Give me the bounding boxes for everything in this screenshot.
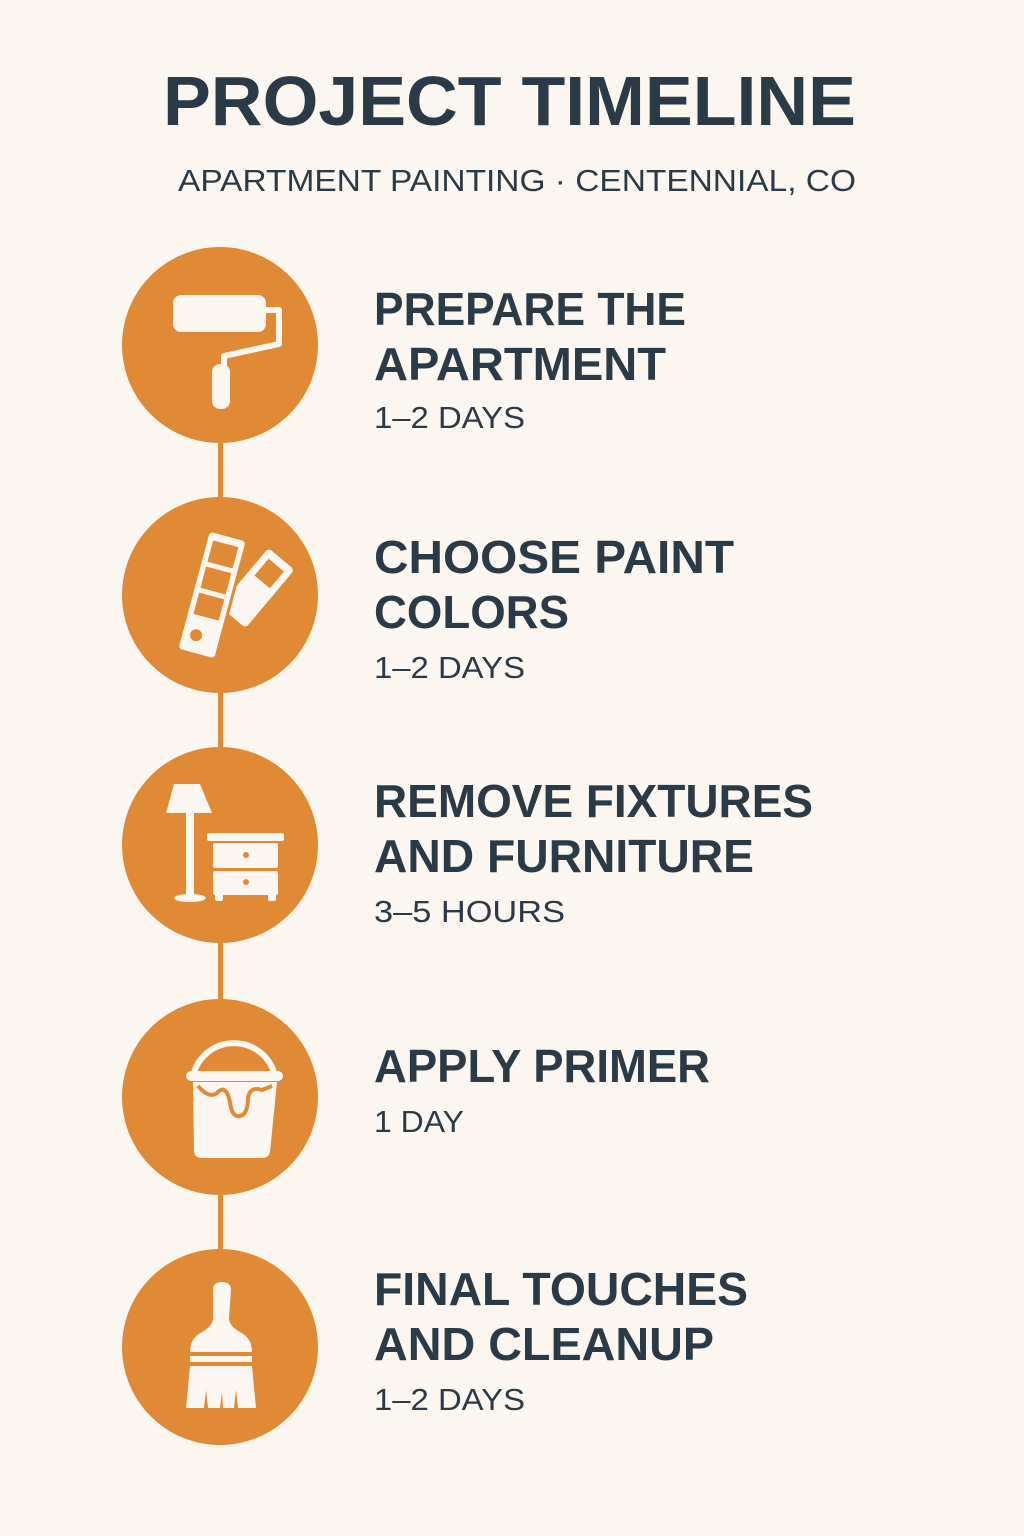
step 1 text: APARTMENT [374,338,666,390]
timeline connector [218,345,223,1345]
icon: paint roller [173,295,279,409]
step 1 text [374,283,686,435]
step 4: primer [122,999,710,1195]
step 3: furniture [122,747,813,943]
step 2 text [374,531,734,685]
icon: paint bucket [186,1043,283,1158]
step 1 text: PREPARE THE [374,283,686,335]
step 3 text [374,775,813,929]
step 5: cleanup [122,1249,748,1445]
title: PROJECT TIMELINE [163,62,856,140]
icon: paintbrush [186,1282,256,1408]
step 3 text: 3–5 HOURS [374,894,565,929]
step 4 text [374,1040,710,1139]
step 5 text [374,1263,748,1417]
icon: lamp and nightstand [166,784,284,902]
step 2 text: CHOOSE PAINT [374,531,734,583]
step 4 text: 1 DAY [374,1104,464,1139]
step 1: prepare [122,247,686,443]
step 1 text: 1–2 DAYS [374,400,525,435]
step 3 text: AND FURNITURE [374,830,754,882]
step 5 text: FINAL TOUCHES [374,1263,748,1315]
step 5 text: 1–2 DAYS [374,1382,525,1417]
icon: color swatches [177,530,294,660]
step 2 text: COLORS [374,586,569,638]
step 2: colors [122,497,734,693]
step 3 text: REMOVE FIXTURES [374,775,813,827]
step 2 text: 1–2 DAYS [374,650,525,685]
step 5 text: AND CLEANUP [374,1318,714,1370]
step 4 text: APPLY PRIMER [374,1040,710,1092]
subtitle: APARTMENT PAINTING · CENTENNIAL, CO [178,163,856,198]
